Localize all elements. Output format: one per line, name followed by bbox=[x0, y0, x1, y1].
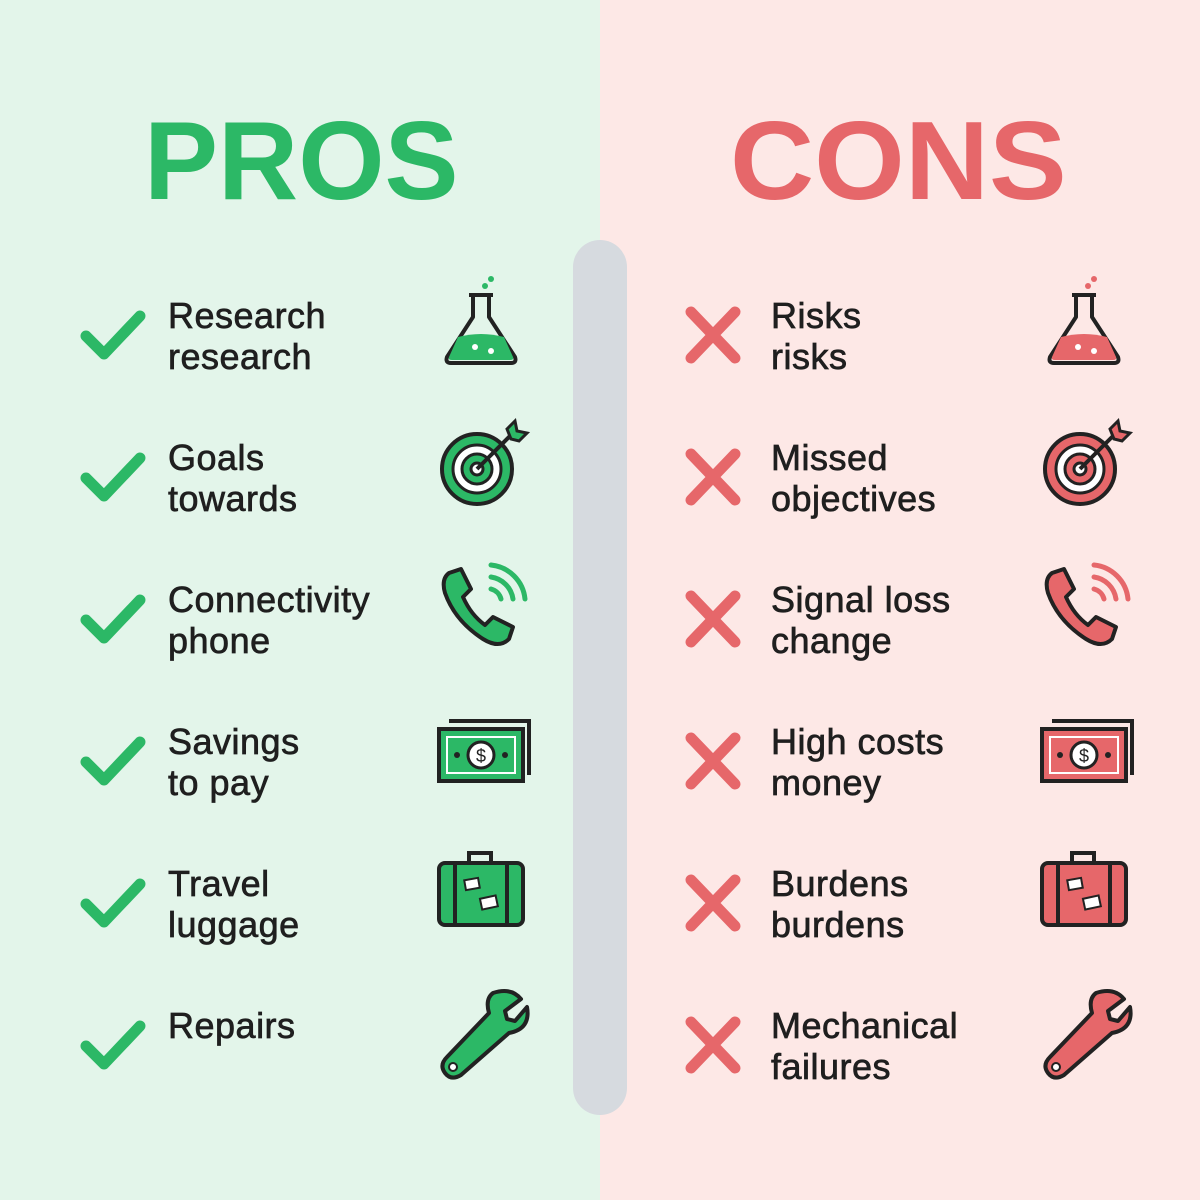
title: pros: PROS bbox=[144, 99, 459, 223]
pro item 5: luggage bbox=[168, 904, 300, 945]
pro item 5 bbox=[80, 851, 525, 945]
pro item 1 bbox=[80, 276, 518, 377]
con item 5: Burdens bbox=[771, 863, 909, 904]
con item 1 bbox=[686, 276, 1120, 377]
con item 5: burdens bbox=[771, 904, 905, 945]
pro item 1: research bbox=[168, 336, 312, 377]
con item 4: money bbox=[771, 762, 882, 803]
con item 6: Mechanical bbox=[771, 1005, 958, 1046]
con item 1: Risks bbox=[771, 295, 862, 336]
con item 6: failures bbox=[771, 1046, 891, 1087]
con item 2: Missed bbox=[771, 437, 888, 478]
con item 6 bbox=[686, 989, 1133, 1087]
con item 5 bbox=[686, 851, 1128, 945]
con item 3: Signal loss bbox=[771, 579, 951, 620]
con item 4: $ bbox=[1079, 746, 1089, 766]
pro item 1: Research bbox=[168, 295, 326, 336]
panel: pros bbox=[80, 276, 531, 1080]
pro item 3: phone bbox=[168, 620, 271, 661]
pro item 2: towards bbox=[168, 478, 298, 519]
con item 2: objectives bbox=[771, 478, 936, 519]
con item 1: risks bbox=[771, 336, 848, 377]
pro item 2: Goals bbox=[168, 437, 265, 478]
con item 3 bbox=[686, 562, 1130, 661]
pro item 4: Savings bbox=[168, 721, 300, 762]
con item 4: High costs bbox=[771, 721, 944, 762]
pro item 6 bbox=[80, 989, 530, 1080]
pro item 2 bbox=[80, 418, 530, 519]
pro item 4 bbox=[80, 719, 531, 803]
title: cons: CONS bbox=[730, 99, 1067, 223]
pro item 6: Repairs bbox=[168, 1005, 296, 1046]
pro item 3 bbox=[80, 562, 528, 661]
pro item 5: Travel bbox=[168, 863, 270, 904]
con item 3: change bbox=[771, 620, 892, 661]
con item 4 bbox=[686, 719, 1134, 803]
con item 2 bbox=[686, 418, 1133, 519]
pro item 4: to pay bbox=[168, 762, 269, 803]
pro item 4: $ bbox=[476, 746, 486, 766]
panel: cons bbox=[686, 276, 1134, 1087]
pro item 3: Connectivity bbox=[168, 579, 370, 620]
